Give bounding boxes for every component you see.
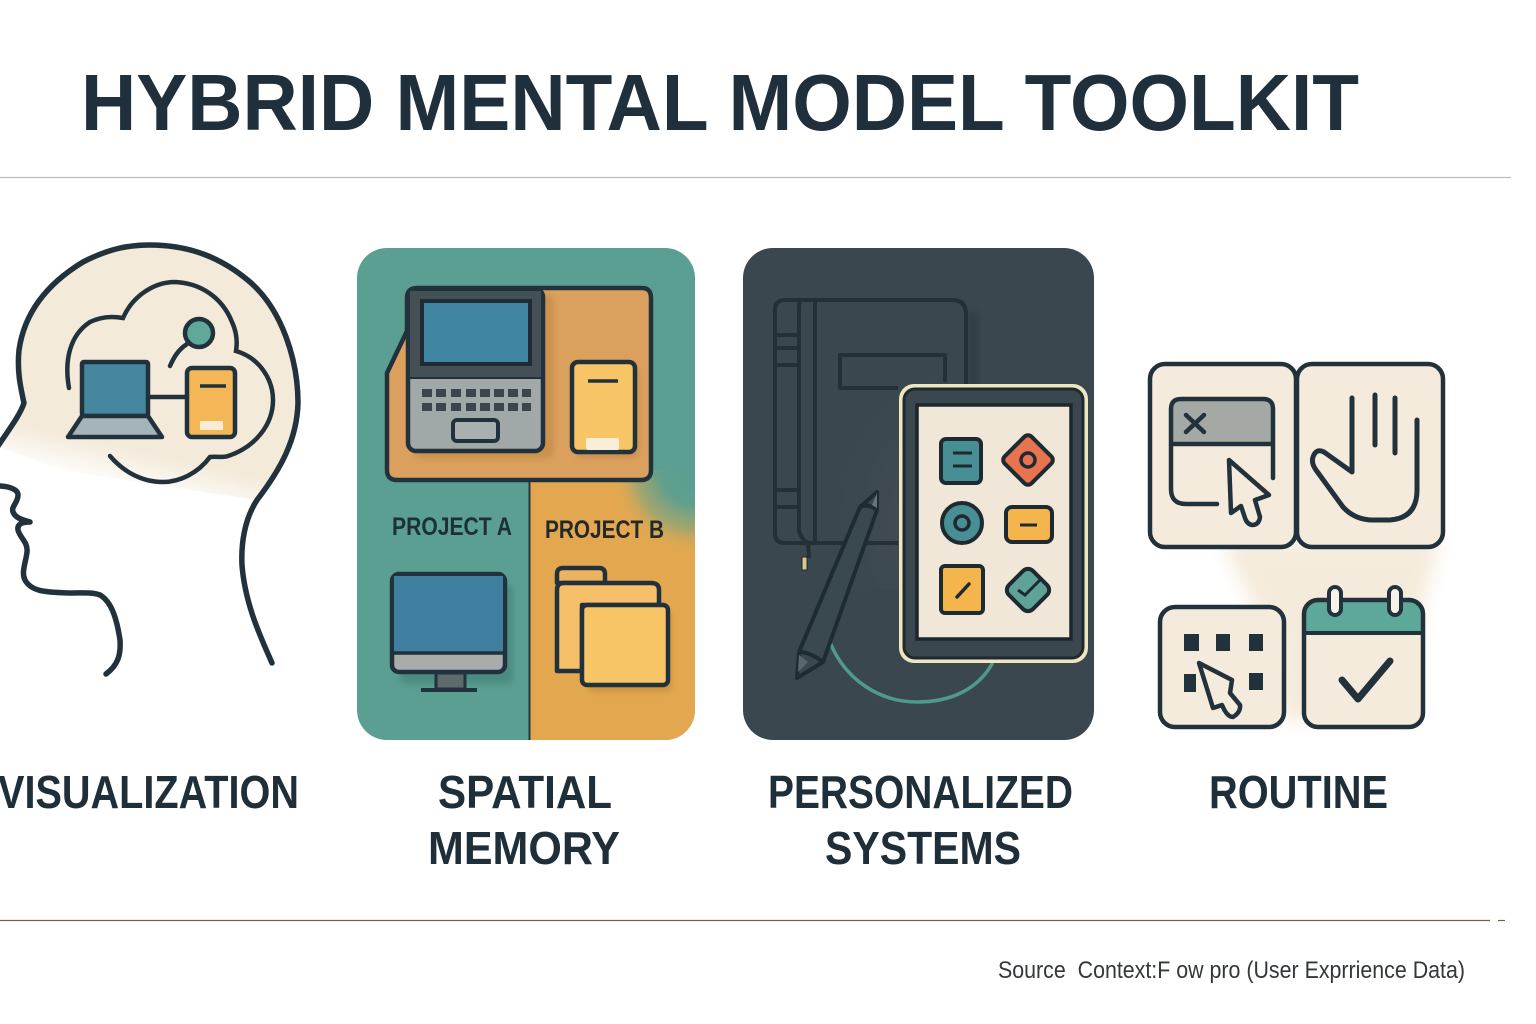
card: stop hand [1297,364,1443,547]
head silhouette [0,245,298,674]
card: window with cursor [1150,364,1296,547]
keyboard keys [422,389,531,411]
idea pin [170,319,213,366]
label: visualization: VISUALIZATION [0,766,299,818]
app icon: circle [942,503,982,543]
card: calendar [1304,587,1423,727]
label: personalized systems: SYSTEMS [825,822,1021,874]
panel: spatial memory [357,248,700,743]
app icon: list [941,439,981,483]
phone icon [187,368,235,437]
desk tray [387,288,651,480]
app icon: pencil square [941,566,983,613]
panel: visualization [0,245,298,674]
label: spatial memory: SPATIAL [438,766,612,818]
label: routine: ROUTINE [1209,766,1388,818]
connector line [148,395,187,399]
tablet glow [840,370,940,590]
label: personalized systems [768,766,1073,874]
project B zone [529,470,700,743]
app icon: check diamond [1004,566,1052,614]
background glow [1220,540,1440,720]
title: HYBRID MENTAL MODEL TOOLKIT [81,58,1359,147]
laptop icon [68,362,162,437]
bookmark tip [802,557,807,570]
label: spatial memory: MEMORY [428,822,620,874]
thought cloud [67,282,273,482]
tablet [899,384,1088,663]
app icon: minus [1006,507,1052,542]
soft shadow [967,312,979,402]
notebook [775,300,966,558]
app icon: diamond [1001,433,1055,487]
label: project A: PROJECT A [392,513,512,541]
monitor [392,574,513,690]
label: spatial memory [428,766,620,874]
charging cord [830,642,992,702]
label: project B: PROJECT B [545,516,664,544]
card: app grid with cursor [1160,607,1284,727]
phone [572,362,639,458]
panel: personalized systems [743,248,1094,740]
laptop [408,289,554,459]
source note: Source Context:F ow pro (User Exprrience Data) [998,957,1465,984]
panel: routine [1150,364,1443,727]
label: personalized systems: PERSONALIZED [768,766,1073,818]
pen [797,492,877,678]
folders [557,568,672,692]
